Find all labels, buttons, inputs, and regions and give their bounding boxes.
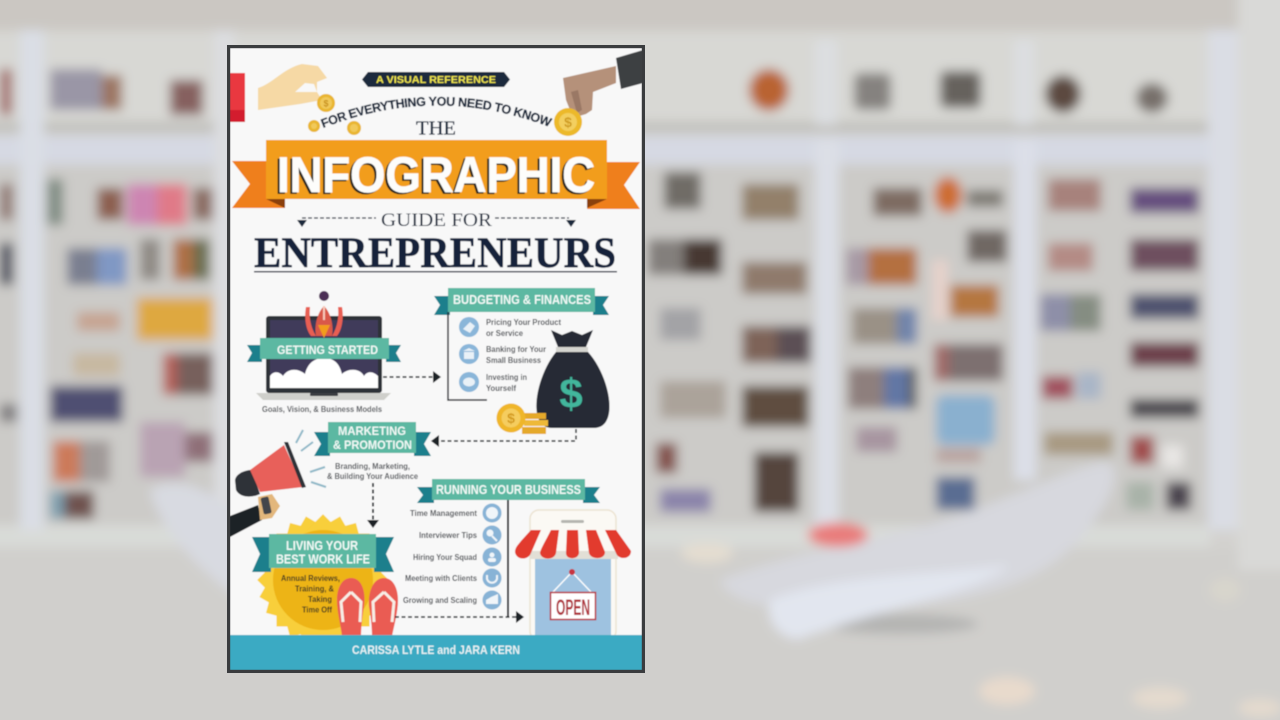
icon: phone storefront [515,510,631,640]
text: running list: Time Management [410,509,477,518]
tagline badge: A VISUAL REFERENCE [376,75,496,86]
text: running list: Growing and Scaling [403,596,477,605]
awning stripes [515,530,631,559]
curved subtitle: FOR EVERYTHING YOU NEED TO KNOW [320,96,553,128]
icon: piggy bank [459,372,479,392]
text: budgeting list: or Service [486,329,524,338]
text: living caption: Annual Reviews, [281,573,340,583]
caption: marketing [327,462,419,481]
text: living caption: Training, & [295,584,334,594]
ribbon: getting started [247,338,401,362]
text: budgeting list [486,318,561,393]
text: running list: Meeting with Clients [405,574,478,583]
arrow: getting started to budgeting [383,371,441,383]
arrow: marketing to living [367,483,379,528]
icon: person [482,548,502,566]
icon: money bag: $ [559,370,583,417]
title: GUIDE FOR with arrows [296,212,576,228]
icon: pricing [459,317,479,337]
ribbon: running [417,479,600,503]
caption: marketing: Branding, Marketing, [335,462,410,471]
ribbon: budgeting: BUDGETING & FINANCES [453,292,591,307]
text: budgeting list: Small Business [486,356,542,365]
text: budgeting list: Yourself [486,384,516,393]
caption: getting started: Goals, Vision, & Business Models [262,405,383,414]
chairs and floor [150,483,240,600]
ribbon: budgeting [434,288,609,315]
text: living caption: Taking [308,594,332,604]
ribbon: living [252,534,394,572]
cover frame [227,45,645,673]
open sign: OPEN [556,595,590,620]
panel: getting started [247,291,401,414]
title: ENTREPRENEURS: ENTREPRENEURS [254,230,616,277]
title: GUIDE FOR with arrows: GUIDE FOR [381,210,492,231]
icon: megaphone in hand [230,442,306,537]
panel: living your best work life [252,514,398,646]
footer band: authors [230,635,642,670]
panel: marketing and promotion [230,422,431,537]
icon: flip-flops [337,578,398,636]
text: budgeting list: Banking for Your [486,345,546,354]
book cover [227,45,645,673]
icon: falling coins [308,120,361,135]
red bookmark tab [230,73,245,122]
icon: coins stack: $ [507,410,515,426]
text: budgeting list: Pricing Your Product [486,318,561,327]
right shelves [1048,179,1101,211]
icon: sun [257,514,389,646]
ribbon: marketing [314,422,431,456]
icon: coins stack [496,404,548,434]
ribbon: marketing: MARKETING [338,424,406,438]
footer band: authors: CARISSA LYTLE and JARA KERN [352,643,520,657]
title: THE: THE [416,118,456,140]
ribbon: marketing: & PROMOTION [333,438,412,452]
icon: magnifier [482,526,502,544]
icon: bank [459,344,479,364]
panel: budgeting and finances [434,288,609,434]
icon: left hand dropping coin: $ [323,98,329,108]
text: budgeting list: Investing in [486,373,527,382]
caption: marketing: & Building Your Audience [327,472,419,481]
tagline badge [362,72,510,87]
icon: right hand with coin [554,50,643,136]
ribbon: living: BEST WORK LIFE [276,552,370,566]
text: running list: Hiring Your Squad [413,553,477,562]
text: running list [403,509,478,605]
ribbon: living: LIVING YOUR [286,538,359,553]
text: living caption [281,573,340,614]
middle-left shelves [664,172,701,209]
icon: left hand dropping coin [258,64,335,112]
icon: right hand with coin: $ [564,114,572,130]
arrow: budgeting to marketing [431,429,576,447]
ribbon: getting started: GETTING STARTED [277,345,378,357]
icon: clock [482,504,502,522]
icon: handshake [482,568,502,588]
title banner: INFOGRAPHIC [232,140,640,209]
icon: growth chart [482,590,502,610]
title banner: INFOGRAPHIC: INFOGRAPHIC [275,148,593,204]
bracket line [448,312,487,400]
centre shelves [873,188,922,216]
arrow: living to running [395,611,524,623]
icon: laptop with rocket [256,291,391,400]
text: living caption: Time Off [302,604,332,614]
icon: money bag [536,330,609,428]
vertical connector line [507,500,509,617]
left shelves [0,184,13,220]
panel: running your business [403,479,631,640]
top row objects [0,69,12,115]
title banner: INFOGRAPHIC: INFOGRAPHIC [277,147,595,203]
ribbon: running: RUNNING YOUR BUSINESS [436,483,581,497]
text: running list: Interviewer Tips [419,531,478,540]
icon: sound lines [296,430,326,487]
